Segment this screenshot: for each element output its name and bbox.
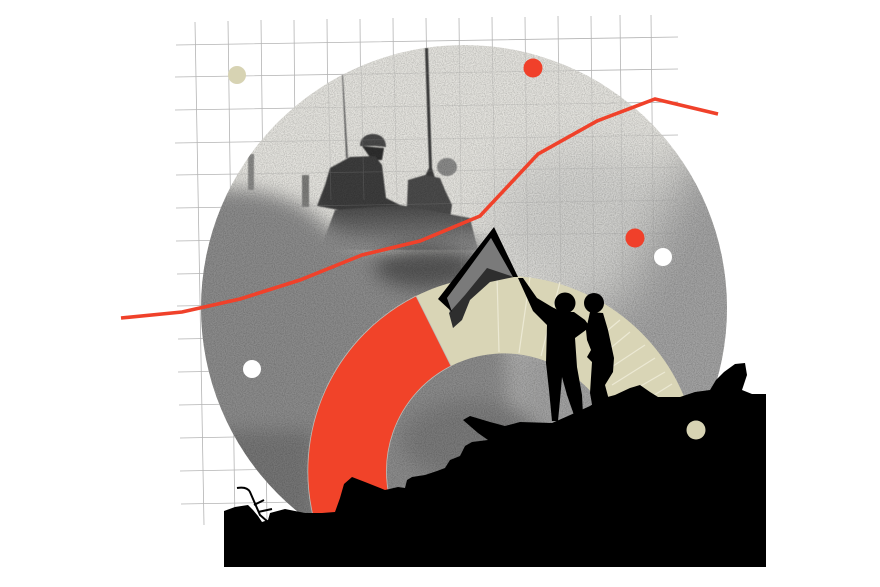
donut chart bbox=[308, 275, 699, 520]
distant haze bbox=[490, 144, 727, 423]
rubble silhouette bbox=[224, 363, 766, 567]
donut beige segment bbox=[416, 275, 699, 471]
illustration bbox=[120, 15, 766, 567]
background grid bbox=[175, 15, 678, 525]
red trend line bbox=[121, 99, 718, 318]
people silhouettes bbox=[518, 278, 614, 421]
photo disc bbox=[201, 45, 727, 513]
dot: red right bbox=[626, 228, 644, 248]
ground smoke bbox=[201, 178, 540, 513]
dot: red top bbox=[524, 58, 542, 78]
second person bbox=[584, 293, 614, 410]
dot: beige top left bbox=[228, 66, 246, 84]
dot: white right bbox=[654, 248, 672, 266]
soldier and tank bbox=[248, 48, 478, 250]
bicycle silhouette bbox=[237, 488, 272, 522]
donut red segment bbox=[308, 296, 451, 520]
person raising flag bbox=[518, 278, 590, 421]
dot: white left bbox=[243, 360, 261, 378]
dot: beige on rubble bbox=[686, 420, 706, 440]
flag bbox=[438, 227, 518, 328]
